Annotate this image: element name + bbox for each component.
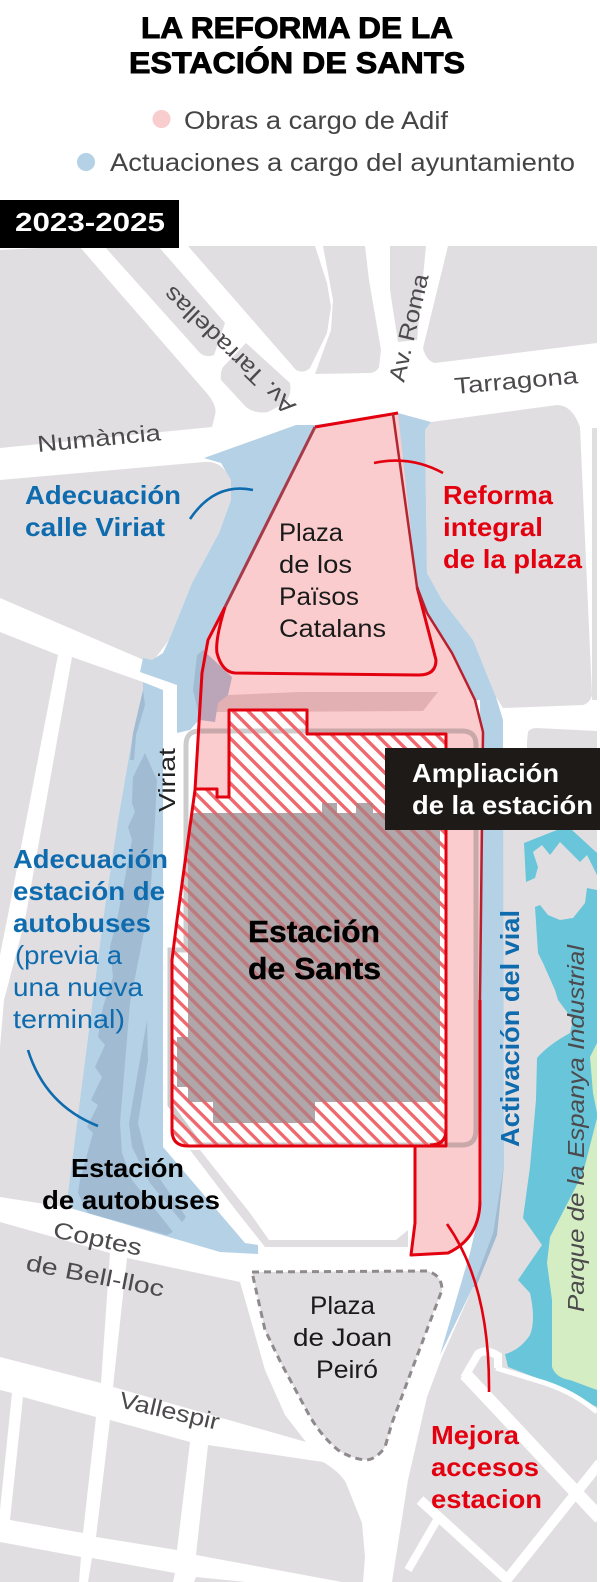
- label: Plaza de los Països Catalans: Països: [279, 583, 359, 611]
- bus station darker shapes: [78, 650, 504, 1287]
- red outlines: [172, 413, 483, 1255]
- label: plaza Joan Peiró: de Joan: [293, 1324, 392, 1352]
- street names: Viriat: [154, 747, 180, 812]
- label: Adecuación calle Viriat: Adecuación: [25, 480, 181, 510]
- label: Activación del vial: Activación del vial: [495, 910, 525, 1147]
- label: Adecuación estación de autobuses: una nueva: [13, 972, 144, 1002]
- period tag: [0, 200, 179, 248]
- label: Adecuación estación de autobuses: estación de: [13, 876, 165, 906]
- label: Estación de Sants: Estación: [248, 914, 380, 949]
- vial outline: [417, 587, 483, 1000]
- label: Adecuación estación de autobuses: autobuses: [13, 908, 151, 938]
- label: Mejora accesos estacion: accesos: [431, 1452, 539, 1482]
- period tag: 2023-2025: [15, 207, 165, 237]
- label: Reforma integral de la plaza: de la plaza: [443, 544, 583, 574]
- label: Mejora accesos estacion: estacion: [431, 1484, 542, 1514]
- street names: Numància: [36, 419, 162, 457]
- street names: Parque de la Espanya Industrial: [563, 944, 589, 1312]
- legend item: ayuntamiento: Actuaciones a cargo del ayuntamiento: [110, 149, 575, 177]
- label: Estación de autobuses: [42, 1153, 220, 1215]
- old station ring: [170, 731, 476, 1145]
- street names: Av. Tarradellas: [158, 281, 300, 420]
- label: Reforma integral de la plaza: [443, 480, 583, 574]
- label: Plaza de los Països Catalans: [279, 519, 386, 643]
- station footprint: [172, 710, 446, 1146]
- street names: [24, 271, 589, 1435]
- line: calle Viriat: [190, 489, 253, 519]
- parc: park water: [505, 830, 597, 1407]
- plaza shade band: [215, 692, 438, 712]
- panel: station expansion: [170, 710, 476, 1146]
- label: Reforma integral de la plaza: integral: [443, 512, 543, 542]
- blue area: bus station: [68, 682, 258, 1254]
- Plaza Joan Peiró: [252, 1271, 442, 1460]
- title: LA REFORMA DE LA: [141, 12, 453, 45]
- plaza outline: [217, 587, 436, 675]
- label: Estación de autobuses: Estación: [71, 1153, 184, 1183]
- label: Reforma integral de la plaza: Reforma: [443, 480, 554, 510]
- callout: Ampliación de la estación: Ampliación: [412, 758, 559, 788]
- label: Adecuación estación de autobuses: [13, 844, 168, 1034]
- line: accesos: [447, 1224, 489, 1392]
- line: reforma plaza: [374, 461, 443, 473]
- hatch: [172, 710, 446, 1146]
- street names: Coptes: [51, 1216, 144, 1261]
- shade over blue: [200, 650, 232, 722]
- label: Adecuación estación de autobuses: terminal): [13, 1004, 125, 1034]
- label: Adecuación estación de autobuses: Adecuación: [13, 844, 168, 874]
- label: Adecuación calle Viriat: calle Viriat: [25, 512, 165, 542]
- label: Estación de Sants: [248, 914, 381, 986]
- hatch over building: [177, 803, 440, 1123]
- label: Plaza de los Països Catalans: de los: [279, 551, 352, 579]
- label: plaza Joan Peiró: Peiró: [316, 1356, 378, 1384]
- label: Estación de autobuses: de autobuses: [42, 1185, 220, 1215]
- legend item: Adif: Obras a cargo de Adif: [184, 107, 448, 135]
- roads lower right: [408, 1351, 600, 1582]
- station building: [177, 803, 440, 1123]
- blue area: calle Viriat and vial: [140, 413, 504, 1355]
- label: plaza Joan Peiró: Plaza: [310, 1292, 375, 1320]
- street names: Tarragona: [453, 362, 579, 399]
- line: bus station: [28, 1050, 98, 1126]
- park lawn: [547, 1043, 597, 1390]
- panel: Adif pink area: [172, 413, 483, 1255]
- street names: Vallespir: [117, 1387, 222, 1435]
- callout lines: [28, 461, 489, 1392]
- legend: [77, 107, 575, 177]
- label: Mejora accesos estacion: Mejora: [431, 1420, 520, 1450]
- label: Plaza de los Països Catalans: Catalans: [279, 615, 386, 643]
- label: Plaza de los Països Catalans: Plaza: [279, 519, 343, 547]
- panel: ayuntamiento blue areas: [68, 413, 504, 1355]
- label: Estación de Sants: de Sants: [248, 951, 381, 986]
- label: Adecuación estación de autobuses: (previa a: [15, 940, 123, 970]
- label: Mejora accesos estacion: [431, 1420, 542, 1514]
- station outline: [172, 607, 446, 1146]
- street names: de Bell-lloc: [24, 1249, 166, 1302]
- label: Adecuación calle Viriat: [25, 480, 181, 542]
- callout: Ampliación de la estación: [385, 748, 600, 830]
- street names: Av. Roma: [384, 271, 434, 384]
- label: plaza Joan Peiró: [293, 1292, 392, 1384]
- title: [129, 12, 465, 80]
- callout: Ampliación de la estación: de la estación: [412, 790, 593, 820]
- title: ESTACIÓN DE SANTS: [129, 46, 465, 80]
